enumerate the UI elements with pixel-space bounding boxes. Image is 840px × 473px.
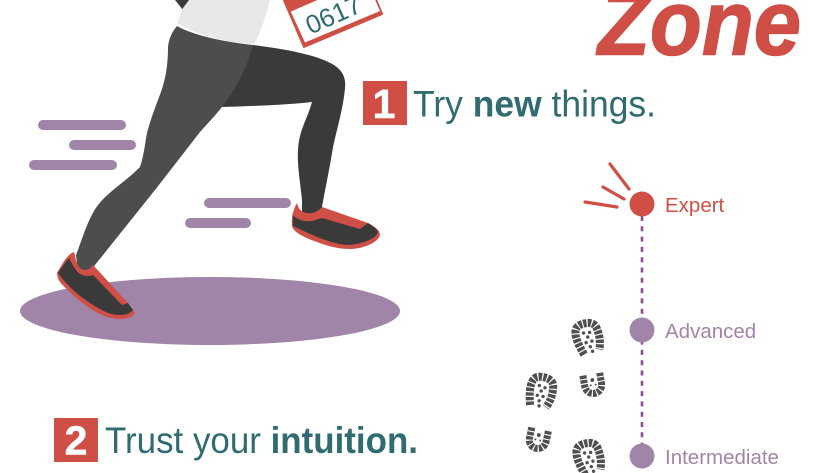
advanced node — [630, 318, 756, 343]
tip 1 text: Try new things. — [413, 82, 656, 124]
footprint sole 1 — [573, 321, 603, 356]
expert node — [630, 192, 725, 217]
number badge 1 — [363, 81, 407, 127]
front shoe — [292, 203, 380, 249]
speed lines — [29, 120, 291, 228]
footprint sole 3 — [574, 441, 604, 473]
intermediate node: Intermediate — [665, 446, 779, 469]
expert node: Expert — [665, 194, 725, 217]
intermediate node — [630, 444, 779, 469]
back leg — [76, 26, 253, 274]
tip 1 — [363, 81, 656, 127]
skill timeline — [585, 164, 779, 473]
front leg — [222, 45, 345, 218]
footprint sole 2 — [527, 375, 555, 410]
advanced node: Advanced — [665, 320, 756, 343]
number badge 2: 2 — [65, 418, 87, 464]
runner — [57, 0, 380, 319]
number badge 2 — [54, 418, 98, 464]
shirt — [177, 0, 270, 44]
arm — [175, 0, 193, 10]
tip 2 — [54, 418, 418, 464]
dashed line — [641, 216, 643, 473]
expert rays — [585, 164, 629, 207]
tip 2 text: Trust your intuition. — [105, 420, 418, 461]
number badge 1: 1 — [373, 81, 395, 127]
footprint heel 2 — [528, 427, 548, 450]
footprint heel 1 — [583, 373, 603, 395]
race bib — [277, 0, 382, 47]
ground ellipse — [20, 277, 400, 345]
back shoe — [57, 252, 135, 319]
